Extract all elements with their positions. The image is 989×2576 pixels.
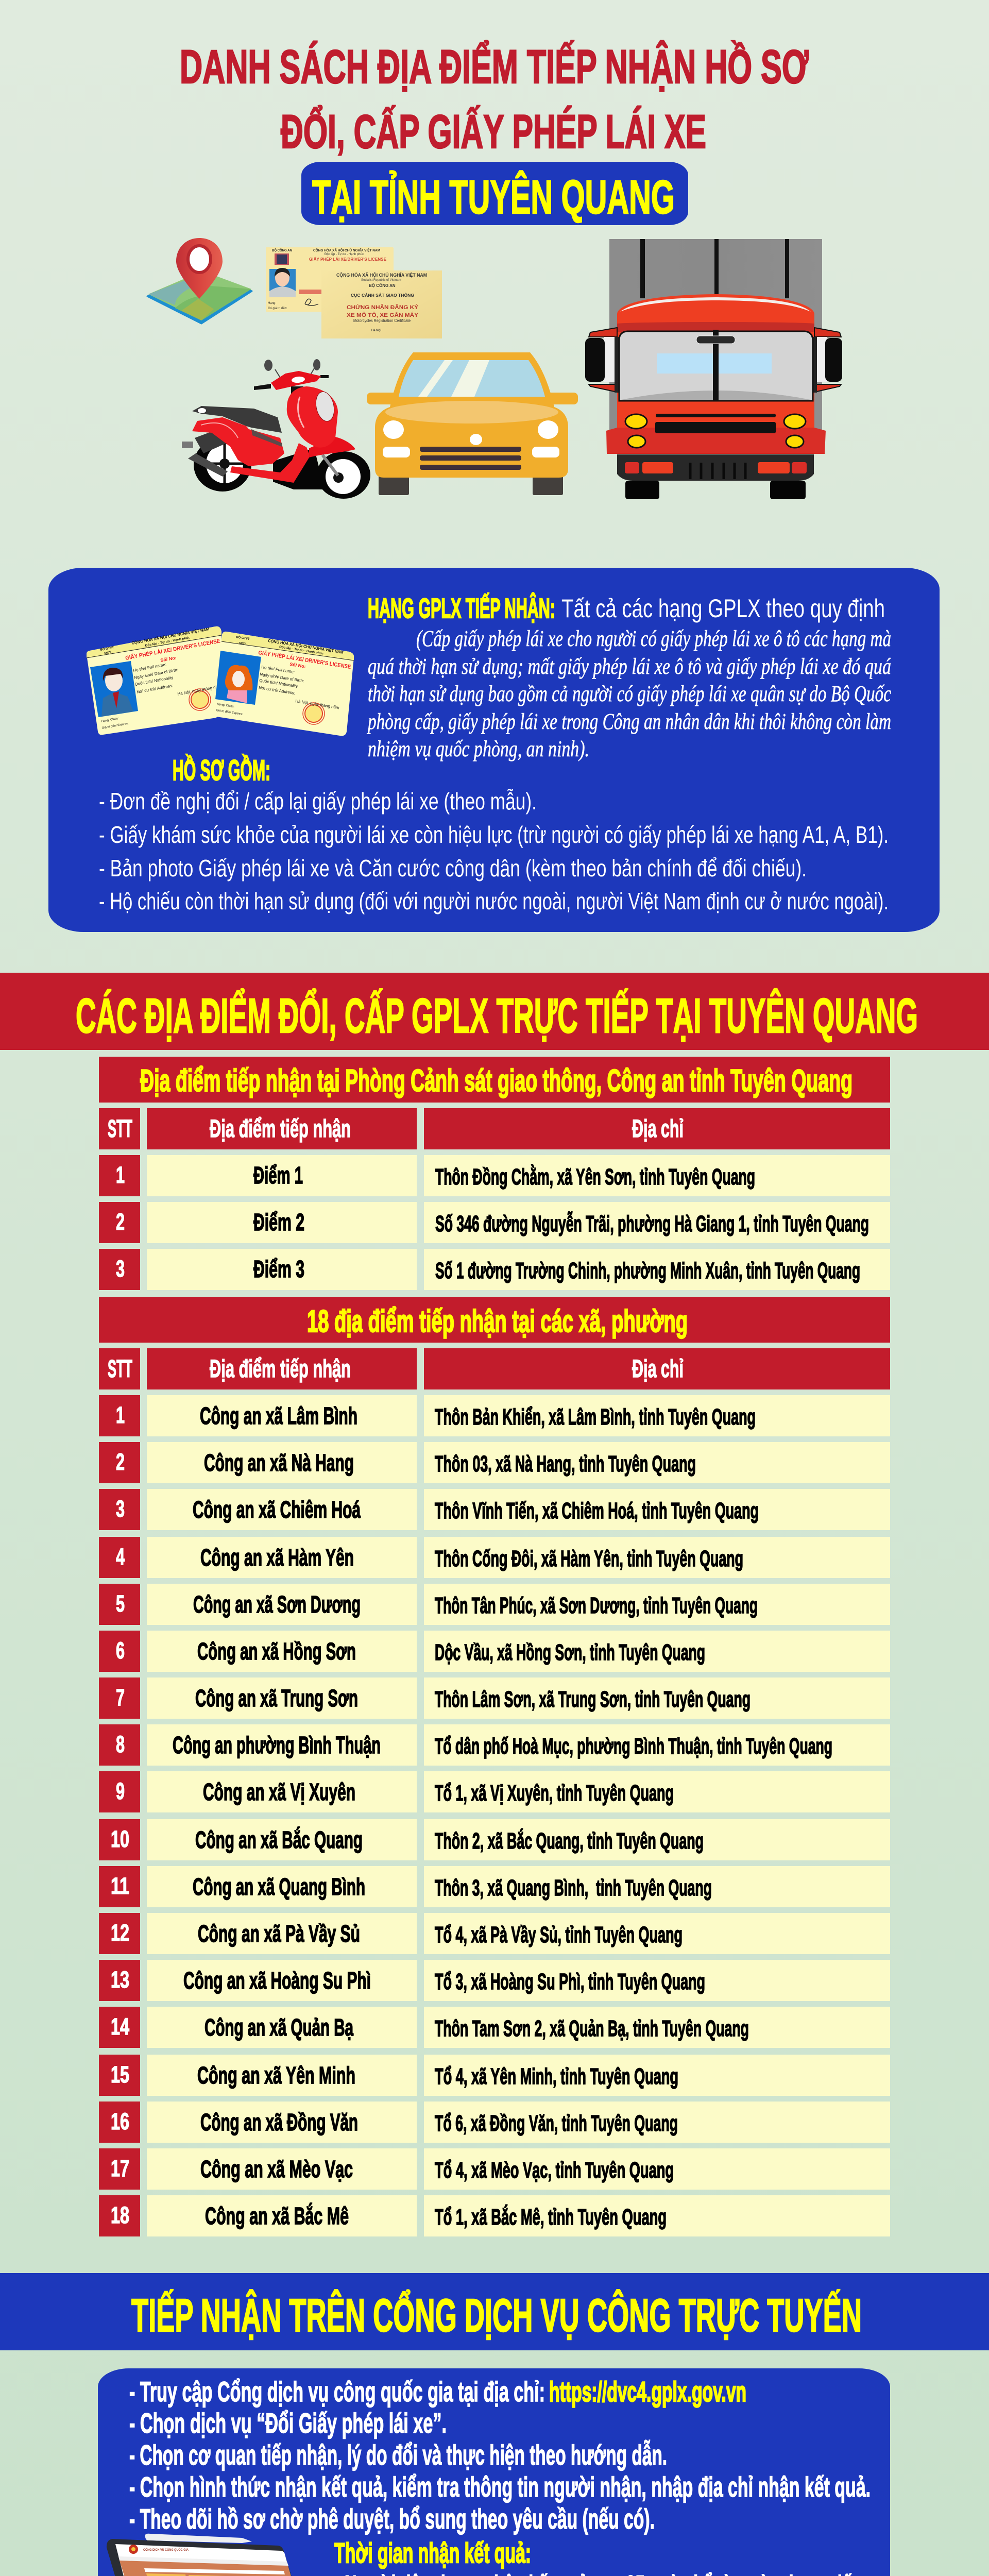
- row 1: Công an xã Lâm Bình: [200, 1402, 357, 1429]
- row 4: 4: [116, 1544, 125, 1570]
- illustration: two licence cards: MOT: [239, 642, 246, 646]
- row 11: Công an xã Quang Bình: [193, 1873, 365, 1900]
- illustration: two licence cards: [87, 626, 354, 736]
- row 18: Công an xã Bắc Mê: [205, 2202, 349, 2229]
- row 3: [99, 1249, 890, 1290]
- row 4: Công an xã Hàm Yên: [200, 1544, 354, 1571]
- row 9: [99, 1771, 890, 1812]
- row 13: 13: [111, 1967, 129, 1993]
- row 3: [99, 1489, 890, 1530]
- table header: [99, 1348, 890, 1389]
- row 16: [99, 2102, 890, 2143]
- text block: online steps: [129, 2376, 871, 2535]
- text block: licence exchange conditions: [367, 626, 891, 761]
- icon: driving licence and registration cards: Hà Nội: [371, 329, 381, 332]
- illustration: two licence cards: Số/ No:: [160, 655, 177, 663]
- row 3: 3: [116, 1256, 125, 1282]
- illustration: two licence cards: Ngày sinh/ Date of Birth:: [260, 672, 304, 683]
- row 11: [99, 1866, 890, 1907]
- heading: accepted licence classes: [368, 592, 885, 624]
- illustration: two licence cards: BỘ GTVT: [100, 645, 114, 652]
- table header: Địa chỉ: [632, 1355, 684, 1383]
- table heading: traffic police department: [99, 1057, 890, 1103]
- row 1: [99, 1395, 890, 1436]
- title pill: province: [301, 162, 688, 225]
- icon: driving licence and registration cards: Hạng:: [268, 302, 276, 305]
- row 4: [99, 1537, 890, 1578]
- illustration: two licence cards: CỘNG HÒA XÃ HỘI CHỦ NGHĨA VIỆT NAM: [131, 626, 210, 646]
- icon: driving licence and registration cards: CỘNG HÒA XÃ HỘI CHỦ NGHĨA VIỆT NAM: [313, 248, 380, 252]
- icon: driving licence and registration cards: BỘ CÔNG AN: [272, 248, 292, 252]
- icon: driving licence and registration cards: Có giá trị đến:: [268, 307, 287, 310]
- illustration: two licence cards: MOT: [104, 651, 112, 655]
- row 5: [99, 1584, 890, 1625]
- row 7: Công an xã Trung Sơn: [195, 1685, 358, 1711]
- row 1: Thôn Bản Khiển, xã Lâm Bình, tỉnh Tuyên Quang: [435, 1404, 756, 1430]
- row 17: 17: [111, 2155, 129, 2181]
- row 7: Thôn Lâm Sơn, xã Trung Sơn, tỉnh Tuyên Quang: [435, 1687, 751, 1712]
- illustration: two licence cards: Ngày sinh/ Date of Birth:: [134, 667, 179, 680]
- row 18: [99, 2195, 890, 2236]
- row 17: [99, 2148, 890, 2190]
- illustration: two licence cards: GIẤY PHÉP LÁI XE/ DRIVER'S LICENSE: [258, 649, 351, 670]
- icon: driving licence and registration cards: [266, 247, 442, 338]
- row 11: 11: [111, 1873, 129, 1899]
- row 14: Công an xã Quản Bạ: [204, 2014, 353, 2041]
- row 17: Tổ 4, xã Mèo Vạc, tỉnh Tuyên Quang: [435, 2158, 674, 2183]
- row 10: [99, 1819, 890, 1860]
- table header: Địa chỉ: [632, 1115, 684, 1143]
- icon: scooter: [182, 359, 370, 499]
- row 2: Thôn 03, xã Nà Hang, tỉnh Tuyên Quang: [435, 1451, 696, 1477]
- row 15: 15: [111, 2061, 129, 2088]
- icon: driving licence and registration cards: GIẤY PHÉP LÁI XE/DRIVER'S LICENSE: [309, 257, 387, 262]
- illustration: two licence cards: Hà Nội, ngày tháng năm: [295, 699, 340, 710]
- panel: online steps: [98, 2368, 890, 2576]
- row 2: Công an xã Nà Hang: [204, 1449, 354, 1476]
- row 16: Tổ 6, xã Đồng Văn, tỉnh Tuyên Quang: [435, 2111, 678, 2136]
- row 1: 1: [116, 1402, 125, 1428]
- illustration: two licence cards: GIẤY PHÉP LÁI XE/ DRIVER'S LICENSE: [125, 637, 220, 662]
- row 18: Tổ 1, xã Bắc Mê, tỉnh Tuyên Quang: [435, 2204, 667, 2230]
- table header: STT: [108, 1355, 132, 1383]
- text block: online steps: - Chọn cơ quan tiếp nhận, lý do đổi và thực hiện theo hướng dẫn.: [129, 2439, 667, 2471]
- row 5: 5: [116, 1590, 125, 1617]
- illustration: tablet with public service portal: [107, 2534, 407, 2576]
- icon: driving licence and registration cards: Độc lập - Tự do - Hạnh phúc: [325, 253, 364, 256]
- text block: required documents: [99, 788, 889, 914]
- icon: driving licence and registration cards: Motorcycles Registration Certificate: [353, 318, 411, 323]
- text block: licence exchange conditions: nhiệm vụ quốc phòng, an ninh).: [368, 736, 589, 761]
- row 1: [99, 1155, 890, 1196]
- row 8: [99, 1724, 890, 1766]
- row 12: Tổ 4, xã Pà Vầy Sủ, tỉnh Tuyên Quang: [435, 1922, 683, 1947]
- row 6: 6: [116, 1637, 125, 1664]
- row 5: Thôn Tân Phúc, xã Sơn Dương, tỉnh Tuyên Quang: [435, 1593, 758, 1618]
- row 12: 12: [111, 1920, 129, 1946]
- row 9: Công an xã Vị Xuyên: [203, 1778, 355, 1805]
- text block: online steps: - Theo dõi hồ sơ chờ phê duyệt, bổ sung theo yêu cầu (nếu có).: [129, 2503, 655, 2535]
- row 3: 3: [116, 1496, 125, 1522]
- table header: Địa điểm tiếp nhận: [210, 1355, 351, 1383]
- heading: accepted licence classes: HẠNG GPLX TIẾP NHẬN:: [368, 592, 555, 624]
- row 8: Công an phường Bình Thuận: [173, 1732, 381, 1758]
- row 6: Dộc Vầu, xã Hồng Sơn, tỉnh Tuyên Quang: [435, 1640, 705, 1665]
- table header: Địa điểm tiếp nhận: [210, 1115, 351, 1143]
- row 10: 10: [111, 1826, 129, 1852]
- icon: driving licence and registration cards: XE MÔ TÔ, XE GẮN MÁY: [347, 312, 419, 318]
- text block: online steps: - Chọn dịch vụ “Đổi Giấy phép lái xe”.: [129, 2407, 447, 2439]
- row 2: [99, 1442, 890, 1483]
- table heading: 18 commune locations: 18 địa điểm tiếp nhận tại các xã, phường: [307, 1304, 688, 1338]
- table heading: 18 commune locations: [99, 1297, 890, 1343]
- text block: online steps: https://dvc4.gplx.gov.vn: [549, 2376, 746, 2408]
- illustration: two licence cards: BỘ GTVT: [236, 635, 250, 641]
- illustration: two licence cards: Hạng/ Class:: [217, 703, 235, 708]
- text block: required documents: - Đơn đề nghị đổi / cấp lại giấy phép lái xe (theo mẫu).: [99, 788, 537, 815]
- row 1: Thôn Đồng Chằm, xã Yên Sơn, tỉnh Tuyên Quang: [435, 1164, 755, 1190]
- illustration: two licence cards: Nơi cư trú/ Address:: [259, 685, 296, 696]
- icon: car: [367, 352, 578, 495]
- row 3: Thôn Vĩnh Tiến, xã Chiêm Hoá, tỉnh Tuyên Quang: [435, 1498, 759, 1523]
- row 15: Công an xã Yên Minh: [197, 2062, 355, 2089]
- icon: driving licence and registration cards: CHỨNG NHẬN ĐĂNG KÝ: [347, 304, 419, 311]
- row 1: 1: [116, 1162, 125, 1188]
- row 15: [99, 2055, 890, 2096]
- illustration: two licence cards: CỘNG HÒA XÃ HỘI CHỦ NGHĨA VIỆT NAM: [268, 638, 344, 655]
- row 10: Công an xã Bắc Quang: [195, 1826, 363, 1853]
- row 18: 18: [111, 2202, 129, 2228]
- row 16: 16: [111, 2108, 129, 2134]
- illustration: two licence cards: Họ tên/ Full name:: [133, 662, 167, 673]
- row 3: Công an xã Chiêm Hoá: [193, 1496, 361, 1523]
- illustration: two licence cards: Nơi cư trú/ Address:: [137, 683, 174, 694]
- illustration: two licence cards: Số/ No:: [289, 662, 306, 669]
- section banner: direct locations: [0, 973, 989, 1050]
- row 14: [99, 2007, 890, 2048]
- row 11: Thôn 3, xã Quang Bình, tỉnh Tuyên Quang: [435, 1875, 712, 1901]
- row 7: 7: [116, 1684, 125, 1710]
- row 13: Công an xã Hoàng Su Phì: [183, 1967, 371, 1994]
- row 2: [99, 1202, 890, 1243]
- illustration: two licence cards: Hà Nội, ngày tháng năm: [177, 684, 222, 697]
- illustration: tablet with public service portal: CỔNG DỊCH VỤ CÔNG QUỐC GIA: [143, 2548, 189, 2552]
- heading: documents: HỒ SƠ GỒM:: [173, 754, 270, 786]
- row 10: Thôn 2, xã Bắc Quang, tỉnh Tuyên Quang: [435, 1828, 704, 1854]
- icon: driving licence and registration cards: BỘ CÔNG AN: [369, 283, 396, 288]
- row 13: [99, 1960, 890, 2001]
- title: ĐỔI, CẤP GIẤY PHÉP LÁI XE: [281, 105, 706, 158]
- row 16: Công an xã Đồng Văn: [200, 2109, 358, 2136]
- title: [180, 40, 809, 158]
- text block: online steps: - Truy cập Cổng dịch vụ công quốc gia tại địa chỉ:: [129, 2376, 545, 2408]
- illustration: two licence cards: Độc lập - Tự do - Hạnh phúc: [145, 636, 191, 648]
- illustration: two licence cards: Quốc tịch/ Nationality: [259, 678, 298, 689]
- row 14: 14: [111, 2013, 129, 2040]
- illustration: two licence cards: Độc lập - Tự do - Hạnh phúc: [279, 646, 324, 656]
- table header: [99, 1108, 890, 1149]
- icon: driving licence and registration cards: CỤC CẢNH SÁT GIAO THÔNG: [351, 293, 414, 298]
- table: traffic police department locations: [99, 1108, 890, 1290]
- row 2: 2: [116, 1209, 125, 1235]
- row 1: Điểm 1: [253, 1162, 303, 1189]
- row 15: Tổ 4, xã Yên Minh, tỉnh Tuyên Quang: [435, 2064, 678, 2089]
- table: commune and ward locations: [99, 1348, 890, 2236]
- row 12: [99, 1913, 890, 1954]
- row 3: Điểm 3: [253, 1256, 304, 1282]
- illustration: two licence cards: Hạng/ Class:: [101, 717, 119, 723]
- row 13: Tổ 3, xã Hoàng Su Phì, tỉnh Tuyên Quang: [435, 1969, 705, 1994]
- table header: STT: [108, 1115, 132, 1143]
- illustration: two licence cards: Giá trị đến/ Expires:: [216, 709, 243, 716]
- heading: accepted licence classes: Tất cả các hạng GPLX theo quy định: [561, 594, 885, 623]
- row 6: Công an xã Hồng Sơn: [197, 1638, 356, 1665]
- heading: result time: Thời gian nhận kết quả:: [334, 2537, 531, 2569]
- row 2: 2: [116, 1449, 125, 1475]
- row 4: Thôn Cống Đôi, xã Hàm Yên, tỉnh Tuyên Quang: [435, 1546, 743, 1571]
- icon: driving licence and registration cards: CỘNG HÒA XÃ HỘI CHỦ NGHĨA VIỆT NAM: [336, 272, 427, 278]
- icon: truck: [585, 239, 842, 499]
- row 2: Điểm 2: [253, 1209, 304, 1235]
- row 6: [99, 1631, 890, 1672]
- row 12: Công an xã Pà Vầy Sủ: [198, 1920, 360, 1947]
- section banner: online portal: [0, 2273, 989, 2350]
- illustration: two licence cards: Giá trị đến/ Expires:: [101, 722, 129, 730]
- row 9: Tổ 1, xã Vị Xuyên, tỉnh Tuyên Quang: [435, 1781, 674, 1806]
- row 7: [99, 1677, 890, 1719]
- illustration: two licence cards: Họ tên/ Full name:: [261, 665, 295, 674]
- panel: licence classes and documents: [48, 568, 940, 932]
- row 8: 8: [116, 1731, 125, 1757]
- icon: driving licence and registration cards: Socialist Republic of Vietnam: [361, 279, 401, 282]
- row 5: Công an xã Sơn Dương: [193, 1591, 361, 1618]
- row 14: Thôn Tam Sơn 2, xã Quản Bạ, tỉnh Tuyên Quang: [435, 2016, 749, 2041]
- icon: map pin: [147, 238, 252, 324]
- row 17: Công an xã Mèo Vạc: [200, 2156, 353, 2182]
- title pill: province: TẠI TỈNH TUYÊN QUANG: [312, 170, 675, 224]
- row 9: 9: [116, 1778, 125, 1804]
- illustration: two licence cards: Quốc tịch/ Nationality: [134, 675, 174, 687]
